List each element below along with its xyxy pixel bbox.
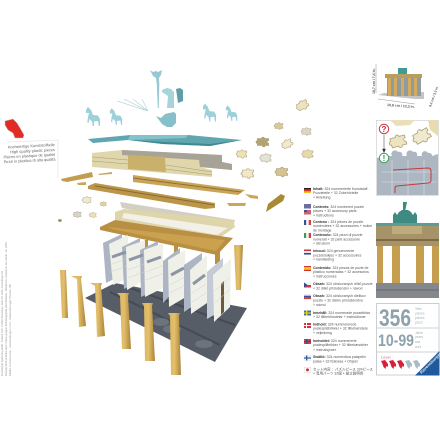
row: Norwegian: Innholdet: 324 nummererte: [313, 339, 357, 343]
age range: 10-99: [378, 332, 414, 350]
hint puzzle pieces: [388, 120, 438, 150]
panel: finished gate photo: [376, 196, 439, 298]
piece count labels: pezzi: [415, 320, 423, 324]
row: French: numérotées + 32 accessoires + notice: [313, 224, 372, 228]
goddess figure: [162, 88, 174, 108]
Ravensburger corner triangle: [415, 351, 440, 376]
columns: [377, 246, 383, 283]
row: German: [304, 187, 369, 200]
material note text: Hochwertige Kunststoffteile: [8, 142, 55, 149]
row: Swedish: Innehåll: 324 numrerade pusselbitar: [313, 311, 371, 315]
row: Dutch: Inhoud: 324 genummerde: [313, 249, 354, 253]
small gate base: [378, 92, 424, 99]
row: German: + Anleitung: [313, 196, 330, 200]
row: Spanish: Contenido: 324 piezas de puzle de: [313, 266, 368, 270]
spears: [117, 99, 148, 111]
floor plate: [85, 283, 247, 362]
row: Danish: [304, 322, 368, 335]
row: Japanese: + 専用パーツ 32個 + 組立説明書: [313, 370, 364, 375]
vertical legal text: Warnung! Nicht für Kinder unter 3 Jahren geeignet. Erstickungsgefahr durch Kleinteile · Attention! Ne convient pas aux enfants · Art. 12551: [5, 241, 8, 376]
row: Finnish: [304, 355, 366, 363]
logo: red bear with material note: [3, 119, 58, 178]
material note text: Pezzi in plastica di alta qualità: [4, 156, 56, 164]
photo background: [376, 196, 438, 298]
vertical legal text: [1, 241, 12, 376]
attic frieze: [92, 150, 232, 177]
row: French: Contenu : 324 pièces de puzzle: [313, 220, 363, 224]
stats frame: [376, 304, 439, 375]
row: French: [304, 220, 372, 232]
red assembly path: [393, 168, 431, 193]
age labels: years: [415, 335, 423, 339]
loose puzzle pieces: [58, 98, 313, 222]
vertical legal text: Made in Germany · ravensburger.com · Ravensburger Puzzle 3D: [9, 284, 12, 376]
row: English: pieces + 32 accessory parts: [313, 209, 357, 213]
quadriga: [393, 202, 417, 223]
row: English: + instructions: [313, 214, 334, 218]
attic: [376, 226, 439, 246]
quadriga: horses, goddess, chariot: [86, 70, 237, 127]
depth label: 8,2 cm / 3,2 in.: [428, 86, 439, 107]
age labels: ans: [415, 340, 421, 344]
standard with eagle: [150, 70, 162, 108]
width line: [378, 99, 415, 104]
gold slab: [100, 220, 233, 255]
age labels: [415, 331, 423, 349]
row: Swedish: + 32 tillbehörsdelar + instruktioner: [313, 315, 367, 319]
row: Slovak: + návod: [313, 303, 326, 307]
row: Italian: Contenuto: 324 pezzi di puzzle: [313, 233, 362, 237]
age labels: Jahre: [415, 331, 423, 335]
height line: [375, 64, 377, 93]
green roof: [376, 223, 439, 226]
row: Dutch: + handleiding: [313, 258, 334, 262]
arrow down: [382, 135, 386, 152]
exploded model of the gate: [58, 70, 313, 375]
row: Japanese: セット内容： パズルピース 324ピース: [313, 366, 373, 371]
row: Spanish: [304, 266, 369, 278]
dimension diagram: small gate: [372, 64, 439, 109]
roof: [88, 135, 242, 146]
row: Dutch: [304, 249, 362, 262]
wall panels: [103, 234, 231, 322]
silver frame strip: [120, 202, 235, 228]
row: French: de montage: [313, 228, 332, 232]
row: Japanese: [304, 366, 373, 375]
row: Swedish: [304, 310, 371, 319]
material note text: [3, 142, 56, 164]
row: Norwegian: puslespillbrikker + 32 tilbehørsdeler: [313, 343, 369, 347]
row: English: Contents: 324 numbered puzzle: [313, 205, 364, 209]
row: Norwegian: + instruksjoner: [313, 348, 337, 352]
columns: [60, 245, 243, 375]
material note text: Pièces en plastique de qualité: [3, 152, 55, 159]
piece count labels: pieces: [415, 312, 425, 316]
row: Spanish: plástico numeradas + 32 accesorios: [313, 270, 369, 274]
hint assembled grey puzzle: [377, 150, 438, 195]
row: Czech: + 32 dílků příslušenství + návod: [313, 286, 362, 290]
content list: [304, 187, 373, 375]
gold beams: [133, 175, 245, 195]
row: Dutch: puzzelstukjes + 32 accessoires: [313, 253, 362, 257]
row: Slovak: puzzle + 32 dielov príslušenstva: [313, 298, 363, 302]
level label: Level: [381, 354, 391, 360]
row: Finnish: Sisältö: 324 numeroitua palapelin: [313, 355, 366, 359]
row: Norwegian: [304, 339, 369, 352]
chariot: [156, 112, 176, 127]
row: Danish: + vejledning: [313, 331, 332, 335]
panel: assembly hint: [376, 120, 438, 195]
row: Finnish: palaa + 32 lisäosaa + Ohjeet: [313, 359, 358, 363]
piece count labels: [415, 307, 425, 324]
material note box outline: [7, 140, 58, 178]
piece count labels: Teile: [415, 307, 422, 311]
level stars: bears: [381, 360, 420, 369]
row: Danish: Indhold: 324 nummererede: [313, 322, 356, 326]
row: Slovak: [304, 294, 366, 307]
small gold parts: [77, 172, 285, 212]
row: Italian: + istruzioni: [313, 242, 330, 246]
age labels: anni: [415, 345, 422, 349]
row: German: Puzzleteile + 32 Zubehörteile: [313, 191, 358, 195]
question mark badge: ?: [382, 125, 387, 134]
piece count: 356: [379, 305, 411, 332]
height label: 18,7 cm / 7,4 in.: [372, 68, 376, 94]
row: Italian: [304, 233, 362, 246]
material note text: High quality plastic pieces: [10, 147, 55, 154]
row: Czech: [304, 282, 373, 290]
base: [376, 283, 439, 298]
icon: red bear piece: [5, 119, 24, 138]
exclamation badge: !: [383, 154, 385, 163]
row: Danish: puslespilsbrikker + 32 tilbehørsdele: [313, 326, 368, 330]
row: Slovak: Obsah: 324 očíslovaných dielikov: [313, 294, 366, 298]
row: Italian: numerati + 32 parti accessorie: [313, 237, 360, 241]
width label: 10,8 cm / 13,3 in.: [387, 103, 415, 109]
small gate building: [385, 74, 422, 78]
row: English: [304, 204, 364, 218]
panel: stats box: [376, 304, 440, 376]
vertical legal text: Ravensburger Spieleverlag GmbH · Postfach 2460 · D-88194 Ravensburg · Distr. CH: Carlit + Ravensburger AG: [1, 271, 4, 376]
support posts: [144, 240, 220, 264]
hint frame: [376, 120, 438, 195]
row: Czech: Obsah: 324 očíslovaných dílků puzzle: [313, 282, 373, 286]
row: Spanish: + instrucciones: [313, 274, 337, 278]
row: German: Inhalt: 324 nummerierte Kunststoff-: [313, 187, 369, 191]
piece count labels: pièces: [415, 316, 425, 320]
